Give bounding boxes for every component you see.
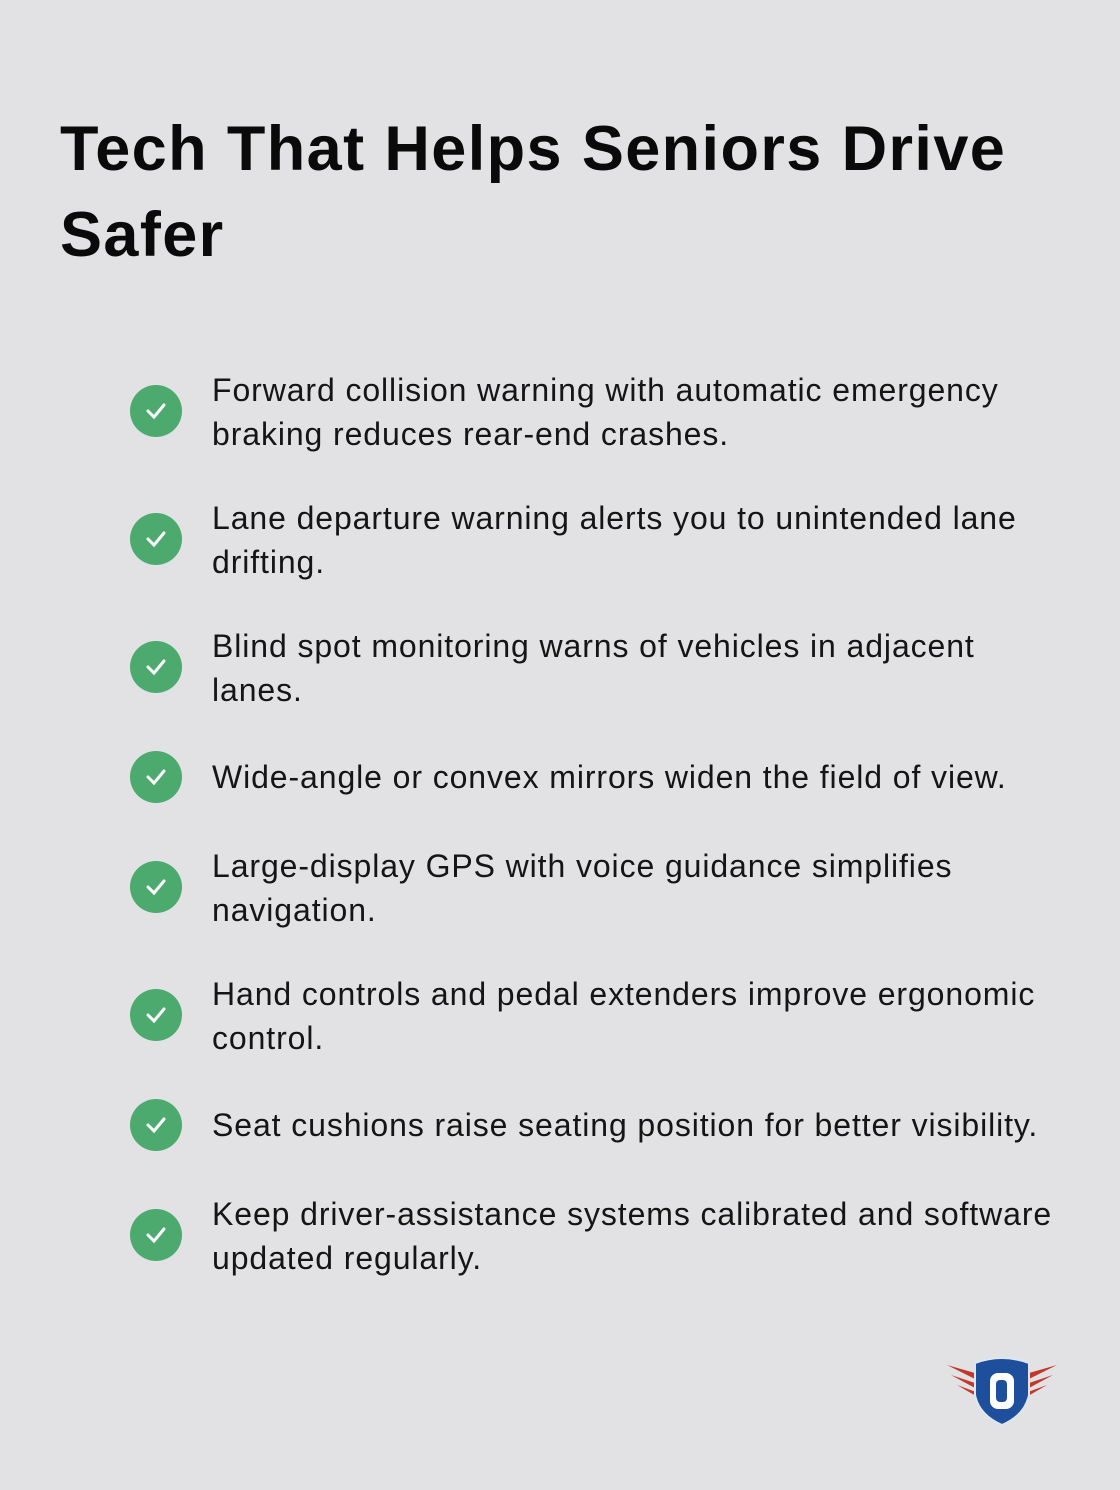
item 8 [130,1196,1052,1276]
text: control. [212,1020,324,1056]
item 6 [130,976,1035,1056]
text: navigation. [212,892,377,928]
item 5 [130,848,952,928]
item 4 [130,751,1007,803]
item 1 [130,372,999,452]
icon: check [130,861,182,913]
text: Wide-angle or convex mirrors widen the field of view. [212,759,1007,795]
item 3 [130,628,975,708]
icon: check [130,1209,182,1261]
text: drifting. [212,544,325,580]
text: Large-display GPS with voice guidance simplifies [212,848,952,884]
icon: check [130,751,182,803]
icon: check [130,385,182,437]
icon: check [130,1099,182,1151]
logo [947,1357,1057,1426]
text: lanes. [212,672,303,708]
text [212,628,975,708]
text [212,500,1017,580]
text: Blind spot monitoring warns of vehicles in adjacent [212,628,975,664]
text: updated regularly. [212,1240,482,1276]
title [60,114,1006,270]
text: Seat cushions raise seating position for better visibility. [212,1107,1038,1143]
icon: check [130,641,182,693]
text: Lane departure warning alerts you to unintended lane [212,500,1017,536]
title: Safer [60,200,225,270]
item 7 [130,1099,1038,1151]
text [212,372,999,452]
text [212,1196,1052,1276]
text: Keep driver-assistance systems calibrated and software [212,1196,1052,1232]
icon: check [130,513,182,565]
text: braking reduces rear-end crashes. [212,416,729,452]
icon: check [130,989,182,1041]
text [212,848,952,928]
text: Hand controls and pedal extenders improve ergonomic [212,976,1035,1012]
title: Tech That Helps Seniors Drive [60,114,1006,184]
text: Forward collision warning with automatic emergency [212,372,999,408]
text [212,976,1035,1056]
item 2 [130,500,1017,580]
